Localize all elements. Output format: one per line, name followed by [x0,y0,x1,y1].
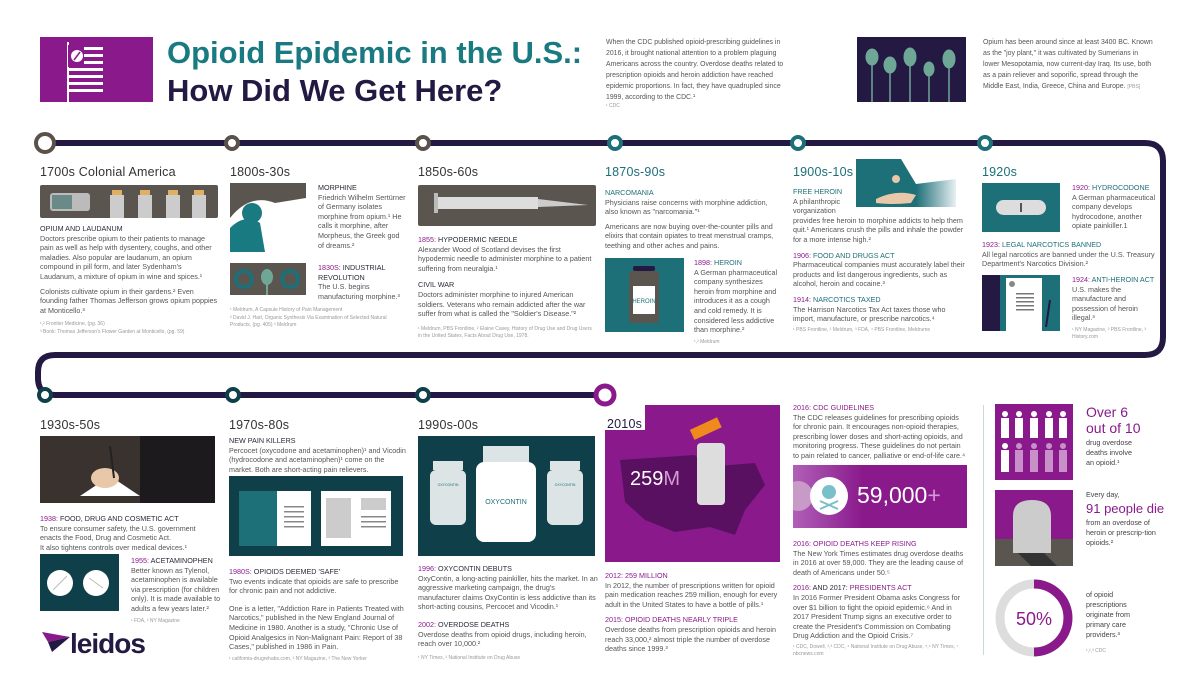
icon: oxycontin bottles: OXYCONTIN [438,483,459,487]
icon: poppies [857,37,966,102]
panel: 1920s [982,165,1155,340]
text: deaths rising / presidents: 2016: OPIOID DEATHS KEEP RISING [793,539,917,548]
text: CDC guidelines: 2016: CDC GUIDELINES [793,403,874,412]
text: free heroin: FREE HEROIN [793,187,842,196]
title [167,35,582,108]
text: free heroin: ¹ PBS Frontline, ² Meldrum, ³ FDA, ⁴ PBS Frontline, Meldrume [793,327,930,333]
text: morphine: MORPHINE [318,183,357,192]
text: 1980s: Two events indicate that opioids are safe to prescribe for chronic pain and not addictive. [229,577,398,595]
stat: 91 people die: from an overdose of heroin or prescrip-tion opioids.² [1086,518,1156,547]
icon: syringe [418,185,596,226]
stat: 91 people die [1086,490,1164,547]
heading: 1900s-10s [793,165,853,179]
icon: oxycontin bottles: OXYCONTIN [555,483,576,487]
text: 1955: Better known as Tylenol, acetaminophen is available via prescription (for children only). It is made available to adults a few years later.² [131,566,220,613]
text: deaths rising / presidents: ¹ CDC, Dowell, ²,³ CDC, ⁴ National Institute on Drug Abuse, ⁵,⁶ NY Times, ⁷ nbcnews.com [793,644,958,657]
panel: 1700s: Doctors prescribe opium to their patients to manage pain as well as help with dysentery, coughs, and other maladies. Also popular are laudanum, an opium compound in pill form, and later Sydenham's Laudanum, a mixture of opium in wine and spices.¹ [40,234,212,281]
text: 1996 [418,564,598,661]
text: 1938: 1938: FOOD, DRUG AND COSMETIC ACT [40,514,179,523]
text: industrial revolution: The U.S. begins manufacturing morphine.³ [318,282,400,301]
text: 1923: 1923: LEGAL NARCOTICS BANNED [982,240,1101,249]
text: 1924 [1072,275,1154,340]
panel: 1800s-30s: ² David J. Hart, Organic Synthesis Via Examination of Selected Natural Products, (pg. 405) ³ Meldrum [230,314,387,328]
icon: journals [229,476,403,556]
panel: 2016 events [793,403,967,657]
text: opium and laudanum: OPIUM AND LAUDANUM [40,224,123,233]
chart: donut 50%: 50% [1016,609,1052,629]
panel: 2016 events: The CDC releases guidelines for prescribing opioids for chronic pain. It encourages non-opioid therapies, prescribing lower doses and short-acting opioids, and monitoring progress. These guidelines do not pertain to pain related to cancer, palliative or end-of-life care.⁴ [793,413,965,460]
panel: 2010s [605,405,780,653]
heading: 1700s Colonial America [40,165,176,179]
panel: 1850s-60s: Alexander Wood of Scotland devises the first hypodermic needle to administer morphine to a patient suffering from neuralgia.¹ [418,245,591,273]
title: How Did We Get Here? [167,73,502,108]
text: new pain killers: NEW PAIN KILLERS [229,436,296,445]
stat: over 6 out of 10: drug overdose [1086,438,1132,447]
stat: over 6 out of 10 [1086,404,1140,467]
stat: over 6 out of 10: an opioid.¹ [1086,458,1120,467]
stat: primary care: prescriptions [1086,600,1127,609]
panel: 1850s-60s: Doctors administer morphine to injured American soldiers. Veterans who remain addicted after the war suffer from what is called the "Soldier's Disease."² [418,290,585,318]
icon: pill [982,183,1060,232]
text: deaths rising / presidents [793,539,964,657]
chart: donut 50% [996,580,1072,656]
text: 1980s [229,567,404,662]
text: free heroin: Pharmaceutical companies must accurately label their products and list dangerous ingredients, such as alcohol, heroin and cocaine.³ [793,260,965,288]
map graphic 259M: 259M [630,468,680,490]
icon: oxycontin bottles: OXYCONTIN [485,499,527,506]
icon: people [995,404,1073,480]
text: 1924: U.S. makes the manufacture and possession of heroin illegal.³ [1072,285,1138,322]
text: free heroin: The Harrison Narcotics Tax Act taxes those who import, manufacture, or prescribe narcotics.⁴ [793,305,945,323]
stat: 91 people die: 91 people die [1086,501,1164,516]
icon: heroin bottle [605,258,684,332]
text: 2012 / 2015 [605,571,778,653]
text: 1923: All legal narcotics are banned under the U.S. Treasury Department's Narcotics Division.² [982,250,1155,268]
banner: 59,000+ [793,465,967,528]
title: Opioid Epidemic in the U.S.: [167,35,582,70]
stat: primary care: originate from [1086,610,1130,619]
map graphic 259M [605,405,780,562]
text: 1924: 1924: ANTI-HEROIN ACT [1072,275,1154,284]
stat: over 6 out of 10: deaths involve [1086,448,1132,457]
title icon: prescription flag [40,37,153,102]
text: industrial revolution: 1830S: INDUSTRIAL REVOLUTION [318,263,385,282]
icon: writing hand [40,436,215,503]
text: 1924: ¹ NY Magazine, ² PBS Frontline, ³ History.com [1072,327,1146,340]
panel: 1870s-90s [605,165,777,345]
text: 1955: 1955: ACETAMINOPHEN [131,556,213,565]
stat: primary care [1086,590,1130,654]
text: 1955: ¹ FDA, ² NY Magazine [131,618,180,624]
icon: sleeper [230,183,306,252]
panel: 1930s-50s [40,418,220,624]
text: 1923 [982,240,1155,268]
text: narcomania: NARCOMANIA [605,188,654,197]
text: 1938: To ensure consumer safety, the U.S. government [40,524,196,533]
panel: 1700s [40,165,218,335]
panel: 1870s-90s: Americans are now buying over-the-counter pills and elixirs that contain opiates to treat menstrual cramps, teething and other aches and pains. [605,222,773,250]
text: free heroin: 1906: FOOD AND DRUGS ACT [793,251,894,260]
text: 1980s: One is a letter, "Addiction Rare in Patients Treated with Narcotics," published in the New England Journal of Medicine in 1980. Another is a study, "Chronic Use of Opioid Analgesics in Non-Malignant Pain: Report of 38 Cases," published in 1986 in Pain. [229,604,404,651]
icon: gears and poppy [230,263,306,295]
text: deaths rising / presidents: 2016: AND 2017: PRESIDENTS ACT [793,583,912,592]
icon: hand pills [856,159,956,207]
heading: 1920s [982,165,1017,179]
text: 1980s: ¹ california-drugrehabs.com, ² NY Magazine, ³ The New Yorker [229,656,367,662]
icon: gravestone [995,490,1073,566]
stat: primary care: primary care [1086,620,1126,629]
banner: 59,000+: 59,000+ [857,482,941,508]
stats panel [995,404,1164,656]
intro text: ¹ CDC [606,103,620,109]
panel: 1800s-30s: ¹ Meldrum, A Capsule History of Pain Management [230,307,342,313]
text: 2012 / 2015: 2015: OPIOID DEATHS NEARLY TRIPLE [605,615,738,624]
text: free heroin: 1914: NARCOTICS TAXED [793,295,881,304]
panel: 1700s: ³ Book: Thomas Jefferson's Flower Garden at Monticello, (pg. 59) [40,329,184,335]
text: 1938 [40,514,196,552]
icon: tablets [40,554,119,611]
stat: over 6 out of 10: out of 10 [1086,420,1140,436]
icon: oxycontin bottles [418,436,595,556]
text: 1898 heroin: 1898: HEROIN [694,258,742,267]
history text: Opium has been around since at least 3400 BC. Known as the "joy plant," it was cultivated by Sumerians in lower Mesopotamia, now current-day Iraq. Its use, both as a pain reliever and soporific, spread through the Middle East, India, Greece, China and Europe. [PBS] [983,39,1153,90]
stat: over 6 out of 10: Over 6 [1086,404,1128,420]
heading: 1850s-60s [418,165,478,179]
text: 1996: ¹ NY Times, ² National Institute on Drug Abuse [418,655,520,661]
panel: 1800s-30s [230,165,406,328]
stat: primary care: providers.³ [1086,630,1120,639]
text: free heroin: A philanthropic vorganization [793,197,840,215]
text: 1996: 2002: OVERDOSE DEATHS [418,620,509,629]
heading: 1990s-00s [418,418,478,432]
text: free heroin [793,187,965,333]
stat: 91 people die: Every day, [1086,490,1119,499]
text: 2012 / 2015: 2012: 259 MILLION [605,571,668,580]
panel: 1870s-90s: Physicians raise concerns with morphine addiction, also known as "narcomania."¹ [605,198,768,216]
text: 2012 / 2015: In 2012, the number of prescriptions written for opioid pain medication reaches 259 million, enough for every adult in the United States to have a bottle of pills.¹ [605,581,777,609]
text: 1920 hydrocodone: 1920: HYDROCODONE [1072,183,1150,192]
heading: 2010s [607,417,642,431]
text: 2012 / 2015: Overdose deaths from prescription opioids and heroin reach 33,000,² almost triple the number of overdose deaths since 1999.³ [605,625,776,653]
heading: 1800s-30s [230,165,290,179]
intro text: When the CDC published opioid-prescribing guidelines in 2016, it brought national attention to a problem plaguing Americans across the country. Overdose deaths related to prescription opioids and heroin addiction have reached epidemic proportions. In fact, they have quadrupled since 1999, according to the CDC.¹ [606,39,783,101]
panel: 1850s-60s: ¹ Meldrum, PBS Frontline, ² Elaine Casey, History of Drug Use and Drug Users in the United States, Facts About Drug Use, 1978. [418,326,592,339]
text: 1980s: 1980S: OPIOIDS DEEMED 'SAFE' [229,567,340,576]
panel: 1700s: ¹,² Frontier Medicine, (pg. 36) [40,321,105,327]
text: 1898 heroin: ¹,² Meldrum [694,339,720,345]
heading: 1930s-50s [40,418,100,432]
icon: bottles [40,185,218,218]
stat: primary care: ¹,²,³ CDC [1086,648,1106,654]
text: industrial revolution [318,263,400,301]
panel: 1900s-10s [793,159,965,333]
text: needle: 1855: HYPODERMIC NEEDLE [418,235,517,244]
heading: 1870s-90s [605,165,665,179]
panel: 1970s-80s [229,418,406,662]
panel: 1700s: Colonists cultivate opium in their gardens.² Even founding father Thomas Jefferson grows opium poppies at Monticello.³ [40,287,217,315]
stat: primary care: of opioid [1086,590,1113,599]
text: deaths rising / presidents: The New York Times estimates drug overdose deaths in 2016 at over 59,000. They are the leading cause of death of Americans under 50.⁵ [793,549,963,577]
text: 1996: 1996: OXYCONTIN DEBUTS [418,564,512,573]
text: 1996: Overdose deaths from opioid drugs, including heroin, reach over 10,000.² [418,630,587,648]
text: deaths rising / presidents: In 2016 Former President Obama asks Congress for over $1 billion to fight the opioid epidemic.⁶ And in 2017 President Trump signs an executive order to create the President's Commission on Combating Drug Addiction and the Opioid Crisis.⁷ [793,593,960,640]
text: 1938: enacts the Food, Drug and Cosmetic Act. [40,533,171,542]
panel: 1990s-00s [418,418,598,661]
text: 1938: It also tightens controls over medical devices.¹ [40,543,187,552]
panel: 1850s-60s [418,165,596,339]
text: 1898 heroin: A German pharmaceutical company synthesizes heroin from morphine and introduces it as a cough and cold remedy. It is considered less addictive than morphine.² [694,268,777,334]
text: morphine: Friedrich Wilhelm Sertürner of Germany isolates morphine from opium.¹ He calls it morphine, after Morpheus, the Greek god of dreams.² [318,193,405,250]
text: civil war: CIVIL WAR [418,280,454,289]
text: free heroin: provides free heroin to morphine addicts to help them quit.¹ Americans crush the pills and inhale the powder for a more intense high.² [793,216,963,244]
text: 1996: OxyContin, a long-acting painkiller, hits the market. In an aggressive marketing campaign, the drug's manufacturer claims OxyContin is less addictive than its short-acting cousins, Percocet and Vicodin.¹ [418,574,598,611]
icon: document [982,275,1060,331]
panel: 1970s-80s: Percocet (oxycodone and acetaminophen)¹ and Vicodin (hydrocodone and acetaminophen)¹ come on the market. Both are short-acting pain relievers. [229,446,406,474]
logo: leidos: leidos [70,628,145,659]
text: 1920 hydrocodone: A German pharmaceutical company develops hydrocodone, another opiate painkiller.1 [1072,193,1155,230]
heading: 1970s-80s [229,418,289,432]
icon: heroin bottle: HEROIN [632,299,656,305]
